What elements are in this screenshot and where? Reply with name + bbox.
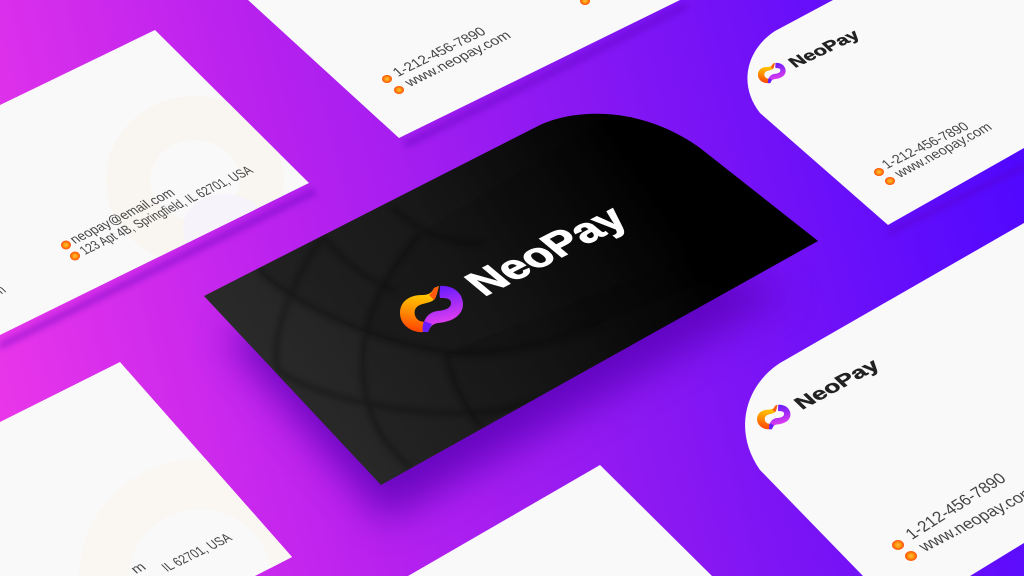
white card: bottom center bbox=[408, 465, 712, 576]
wordmark: NeoPay bbox=[789, 355, 884, 413]
contact lines: m bbox=[127, 559, 149, 576]
contact lines: 123 Apt 4B, Springfield, IL 62701, USA bbox=[76, 163, 257, 257]
contact lines: neopay@email.com bbox=[66, 185, 178, 246]
white card: bottom left bbox=[0, 362, 296, 576]
contact lines: www.neopay.com bbox=[890, 119, 995, 181]
card shadows bbox=[0, 3, 1024, 350]
wordmark: NeoPay bbox=[785, 27, 865, 71]
white card: bottom right bbox=[745, 223, 1024, 576]
white card: top left bbox=[0, 30, 309, 335]
wordmark: NeoPay bbox=[455, 198, 638, 303]
contact lines bbox=[127, 530, 236, 576]
concentric arc pattern bbox=[258, 114, 818, 466]
contact lines bbox=[0, 163, 257, 298]
contact lines bbox=[874, 119, 995, 185]
contact lines bbox=[382, 0, 590, 94]
contact lines: www.neopay.com bbox=[914, 484, 1024, 556]
contact lines: 1-212-456-7890 bbox=[902, 470, 1010, 543]
contact lines: www.neopay.com bbox=[400, 28, 514, 90]
contact lines bbox=[892, 470, 1024, 561]
white card: top center bbox=[248, 0, 680, 138]
white card: top right bbox=[747, 0, 1024, 225]
contact lines: IL 62701, USA bbox=[158, 530, 236, 574]
black card bbox=[204, 114, 818, 485]
contact lines: 1-212-456-7890 bbox=[389, 24, 489, 79]
logo mark bbox=[758, 63, 786, 83]
contact lines: 1-212-456-7890 bbox=[878, 119, 972, 171]
watermark rings bbox=[128, 118, 267, 262]
logo mark bbox=[757, 405, 790, 429]
watermark ring bbox=[206, 459, 292, 568]
black card shadow bbox=[225, 240, 790, 520]
logo mark bbox=[400, 286, 463, 332]
